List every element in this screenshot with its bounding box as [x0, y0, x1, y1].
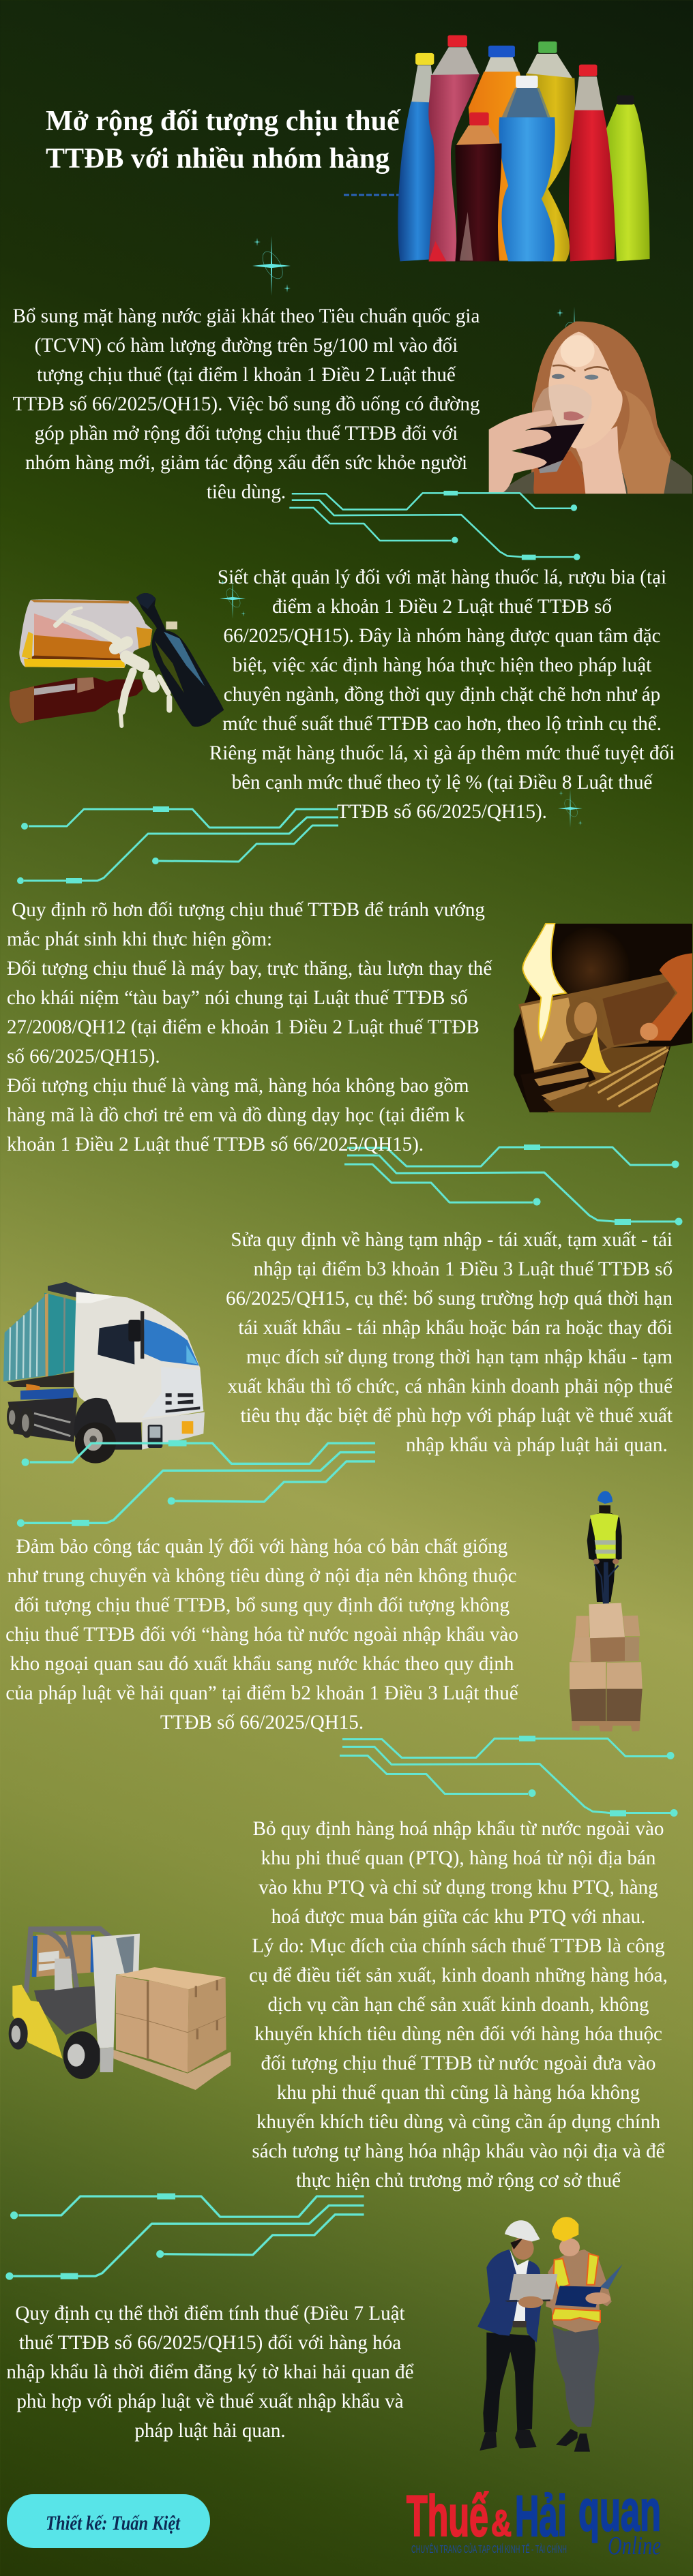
- front fascia: [142, 1367, 203, 1418]
- image: burning banknotes: [514, 924, 692, 1112]
- text block: non-tariff zones: khuyến khích tiêu dùng và cũng cần áp dụng chính: [256, 2111, 660, 2133]
- title: Mở rộng đối tượng chịu thuế: [46, 106, 400, 137]
- bottle: pink: [428, 35, 480, 261]
- text block: clarifying taxable objects: mắc phát sinh khi thực hiện gồm:: [7, 928, 272, 950]
- mast: [92, 1934, 140, 2048]
- flask: [19, 599, 177, 668]
- rear wheels: [7, 1403, 20, 1430]
- bottle: red: [569, 65, 615, 261]
- image: woman drinking: [489, 322, 692, 494]
- text block: tobacco and alcohol: Riêng mặt hàng thuốc lá, xì gà áp thêm mức thuế tuyệt đối: [209, 742, 675, 764]
- logo: &: [491, 2503, 512, 2544]
- bottle: cola: [455, 112, 501, 261]
- bottle: blue left: [398, 53, 437, 261]
- cab body: [74, 1292, 203, 1423]
- clothing: [500, 459, 692, 494]
- text block: soft drinks: tượng chịu thuế (tại điểm l khoản 1 Điều 2 Luật thuế: [37, 364, 456, 386]
- pallet: [113, 2050, 231, 2090]
- text block: temporary import and re-export: [226, 1229, 673, 1456]
- text block: non-tariff zones: thực hiện chủ trương mở rộng cơ sở thuế: [296, 2170, 621, 2192]
- jacket: [587, 1513, 622, 1561]
- text block: tax calculation time: phù hợp với pháp luật về thuế xuất nhập khẩu và: [16, 2391, 404, 2412]
- glass and drink: [530, 384, 592, 428]
- text block: bonded warehouse goods: của pháp luật về hải quan” tại điểm b2 khoản 1 Điều 3 Luật thuế: [5, 1682, 518, 1704]
- bottle: light blue front: [499, 76, 555, 261]
- roll cage: [26, 1928, 111, 2006]
- text block: non-tariff zones: khu phi thuế quan thì cũng là hàng hóa không: [277, 2082, 640, 2104]
- image: container truck: [3, 1282, 205, 1464]
- hair: [530, 322, 671, 494]
- text block: tobacco and alcohol: 66/2025/QH15). Đây là nhóm hàng được quan tâm đặc: [223, 625, 661, 647]
- text block: temporary import and re-export: nhập tại điểm b3 khoản 1 Điều 3 Luật thuế TTĐB số: [254, 1258, 673, 1280]
- text block: bonded warehouse goods: Đảm bảo công tác quản lý đối với hàng hóa có bản chất giống: [16, 1536, 507, 1558]
- text block: soft drinks: góp phần mở rộng đối tượng chịu thuế TTĐB đối với: [35, 423, 458, 444]
- text block: clarifying taxable objects: hàng mã là đồ chơi trẻ em và đồ dùng dạy học (tại điểm k: [7, 1104, 465, 1126]
- sparkle top centre: [252, 236, 291, 296]
- text block: bonded warehouse goods: kho ngoại quan sau đó xuất khẩu sang nước khác theo quy định: [10, 1653, 514, 1675]
- container side: [3, 1297, 46, 1382]
- dark bottle: [136, 593, 224, 727]
- text block: non-tariff zones: Lý do: Mục đích của chính sách thuế TTĐB là công: [252, 1935, 665, 1957]
- legs: [595, 1561, 615, 1602]
- text block: non-tariff zones: dịch vụ cần hạn chế sản xuất kinh doanh, không: [267, 1994, 649, 2016]
- logo: Online: [608, 2532, 661, 2560]
- bumper: [142, 1412, 205, 1450]
- text block: non-tariff zones: Bỏ quy định hàng hoá nhập khẩu từ nước ngoài vào: [253, 1818, 664, 1840]
- text block: clarifying taxable objects: Quy định rõ hơn đối tượng chịu thuế TTĐB để tránh vướng: [12, 899, 485, 921]
- image: two engineers: [477, 2217, 623, 2452]
- logo: Thuế: [407, 2484, 488, 2548]
- image: liquor bottles with wooden figure: [10, 593, 224, 727]
- text block: soft drinks: TTĐB số 66/2025/QH15). Việc bổ sung đồ uống có đường: [12, 393, 480, 415]
- helmet: [598, 1491, 613, 1504]
- cab body: [34, 1986, 98, 2035]
- text block: tobacco and alcohol: TTĐB số 66/2025/QH15).: [337, 801, 547, 823]
- face: [548, 332, 623, 449]
- image: forklift with pallet: [9, 1928, 231, 2090]
- text block: tobacco and alcohol: Siết chặt quản lý đối với mặt hàng thuốc lá, rượu bia (tại: [218, 566, 666, 588]
- text block: tobacco and alcohol: chuyên ngành, đồng thời quy định chặt chẽ hơn như áp: [224, 684, 660, 706]
- logo: [407, 2479, 661, 2560]
- bottle: yellow: [526, 42, 575, 261]
- wooden figure: [56, 608, 169, 726]
- dark background: [514, 924, 692, 1112]
- text block: bonded warehouse goods: chịu thuế TTĐB đối với “hàng hóa từ nước ngoài nhập khẩu vào: [5, 1624, 518, 1646]
- sparkle beside liquor: [220, 578, 246, 619]
- sparkle after second block: [558, 789, 583, 828]
- text block: temporary import and re-export: nhập khẩu và pháp luật hải quan.: [406, 1434, 668, 1456]
- windshield: [143, 1319, 199, 1365]
- front wheel: [63, 2031, 100, 2079]
- text block: tobacco and alcohol: điểm a khoản 1 Điều 2 Luật thuế TTĐB số: [272, 596, 612, 618]
- title: [46, 106, 401, 175]
- neck: [599, 1505, 610, 1515]
- yellow body: [12, 1985, 63, 2059]
- text block: temporary import and re-export: tái xuất khẩu - tái nhập khẩu hoặc bán ra hoặc thay đổi: [238, 1317, 673, 1339]
- circuit 5: [340, 1736, 678, 1817]
- hands and handle: [593, 1559, 619, 1603]
- text block: non-tariff zones: vào khu PTQ và chỉ sử dụng trong khu PTQ, hàng: [259, 1877, 658, 1898]
- text block: clarifying taxable objects: khoản 1 Điều 2 Luật thuế TTĐB số 66/2025/QH15).: [7, 1134, 424, 1155]
- circuit 4: [17, 1440, 375, 1527]
- text block: bonded warehouse goods: [5, 1536, 518, 1733]
- text block: non-tariff zones: đối tượng chịu thuế TTĐB từ nước ngoài đưa vào: [261, 2052, 655, 2074]
- laptop: [505, 2274, 557, 2308]
- safety vest: [590, 1513, 619, 1559]
- text block: temporary import and re-export: Sửa quy định về hàng tạm nhập - tái xuất, tạm xuất - tái: [231, 1229, 673, 1251]
- text block: soft drinks: nhóm hàng mới, giảm tác động xấu đến sức khỏe người: [25, 452, 467, 474]
- text block: tobacco and alcohol: biệt, việc xác định hàng hóa thực hiện theo pháp luật: [233, 654, 651, 676]
- text block: clarifying taxable objects: 27/2008/QH12 (tại điểm e khoản 1 Điều 2 Luật thuế TTĐB: [7, 1016, 480, 1038]
- text block: bonded warehouse goods: TTĐB số 66/2025/QH15.: [160, 1712, 364, 1733]
- woman: [546, 2217, 612, 2452]
- text block: temporary import and re-export: mục đích sử dụng trong thời hạn tạm nhập khẩu - tạm: [246, 1346, 673, 1368]
- text block: tax calculation time: nhập khẩu là thời điểm đăng ký tờ khai hải quan để: [6, 2361, 414, 2383]
- text block: soft drinks: [12, 305, 480, 503]
- small red bottle: [10, 677, 143, 724]
- image: soft drink bottles: [398, 35, 650, 261]
- circuit 3: [344, 1145, 682, 1226]
- wheel arch: [74, 1398, 142, 1450]
- text block: clarifying taxable objects: [7, 899, 492, 1155]
- text block: non-tariff zones: cụ để điều tiết sản xuất, kinh doanh những hàng hóa,: [249, 1965, 668, 1986]
- text block: clarifying taxable objects: Đối tượng chịu thuế là máy bay, trực thăng, tàu lượn thay thế: [7, 958, 492, 980]
- text block: clarifying taxable objects: cho khái niệm “tàu bay” nói chung tại Luật thuế TTĐB số: [7, 987, 468, 1009]
- text block: clarifying taxable objects: Đối tượng chịu thuế là vàng mã, hàng hóa không bao gồm: [7, 1075, 469, 1097]
- text block: non-tariff zones: khuyến khích tiêu dùng nên đối với hàng hóa thuộc: [254, 2023, 662, 2045]
- text block: clarifying taxable objects: số 66/2025/QH15).: [7, 1046, 160, 1067]
- text block: bonded warehouse goods: đối tượng chịu thuế TTĐB, bổ sung quy định đối tượng không: [14, 1594, 510, 1616]
- logo: Hải: [515, 2484, 567, 2548]
- neck: [575, 426, 626, 494]
- title: TTĐB với nhiều nhóm hàng: [46, 143, 389, 175]
- text block: soft drinks: Bổ sung mặt hàng nước giải khát theo Tiêu chuẩn quốc gia: [13, 305, 480, 327]
- footer pill: [7, 2494, 210, 2548]
- text block: soft drinks: tiêu dùng.: [207, 481, 286, 503]
- man: [477, 2220, 541, 2451]
- folder: [555, 2264, 623, 2307]
- boxes: [570, 1603, 643, 1731]
- text block: non-tariff zones: hoá được mua bán giữa các khu PTQ với nhau.: [271, 1906, 645, 1928]
- bottle: lime: [606, 95, 650, 261]
- text block: tax calculation time: Quy định cụ thể thời điểm tính thuế (Điều 7 Luật: [15, 2303, 405, 2324]
- text block: non-tariff zones: [249, 1818, 668, 2192]
- side window: [98, 1322, 134, 1365]
- main banknote: [518, 973, 679, 1072]
- hand: [643, 953, 692, 1041]
- text block: tax calculation time: [6, 2303, 414, 2442]
- logo: CHUYÊN TRANG CỦA TẠP CHÍ KINH TẾ - TÀI CHÍNH: [411, 2543, 567, 2556]
- circuit 2: [17, 806, 338, 884]
- mirror: [128, 1320, 141, 1342]
- rear wheel: [9, 2018, 28, 2050]
- text block: tax calculation time: pháp luật hải quan.: [134, 2420, 286, 2442]
- footer pill: Thiết kế: Tuấn Kiệt: [46, 2512, 181, 2534]
- flame: [522, 924, 566, 1041]
- cardboard boxes: [116, 1967, 226, 1989]
- text block: tobacco and alcohol: bên cạnh mức thuế theo tỷ lệ % (tại Điều 8 Luật thuế: [232, 772, 652, 793]
- warehouse view: [36, 1935, 93, 1977]
- text block: soft drinks: (TCVN) có hàm lượng đường trên 5g/100 ml vào đối: [35, 335, 458, 357]
- text block: temporary import and re-export: xuất khẩu thì tổ chức, cá nhân kinh doanh phải nộp thuế: [228, 1376, 673, 1397]
- container door: [44, 1293, 76, 1378]
- circuit 1: [289, 491, 580, 560]
- text block: temporary import and re-export: tiêu thụ đặc biệt để phù hợp với pháp luật về thuế xuất: [240, 1405, 673, 1427]
- hair strands: [532, 451, 589, 494]
- dashed line: [344, 194, 402, 196]
- image: worker with pallet truck and stacked boxes: [570, 1491, 643, 1731]
- sparkle behind woman: [555, 307, 593, 367]
- text block: tobacco and alcohol: [209, 566, 675, 823]
- circuit 6: [5, 2194, 364, 2280]
- hand: [489, 410, 553, 494]
- text block: non-tariff zones: khu phi thuế quan (PTQ), hàng hoá từ nội địa bán: [261, 1847, 655, 1869]
- front wheel: [75, 1423, 116, 1464]
- text block: temporary import and re-export: 66/2025/QH15, cụ thể: bổ sung trường hợp quá thời hạn: [226, 1288, 673, 1309]
- text block: tax calculation time: thuế TTĐB số 66/2025/QH15) đối với hàng hóa: [19, 2332, 401, 2354]
- container roof: [48, 1282, 95, 1297]
- chassis: [7, 1372, 74, 1387]
- text block: non-tariff zones: sách tương tự hàng hóa nhập khẩu vào nội địa và để: [252, 2140, 665, 2162]
- text block: tobacco and alcohol: mức thuế suất thuế TTĐB cao hơn, theo lộ trình cụ thể.: [222, 713, 662, 735]
- bottle: orange: [469, 46, 528, 260]
- fanned bills: [534, 1046, 670, 1112]
- text block: bonded warehouse goods: như trung chuyển và không tiêu dùng ở nội địa nên không thuộc: [7, 1565, 517, 1587]
